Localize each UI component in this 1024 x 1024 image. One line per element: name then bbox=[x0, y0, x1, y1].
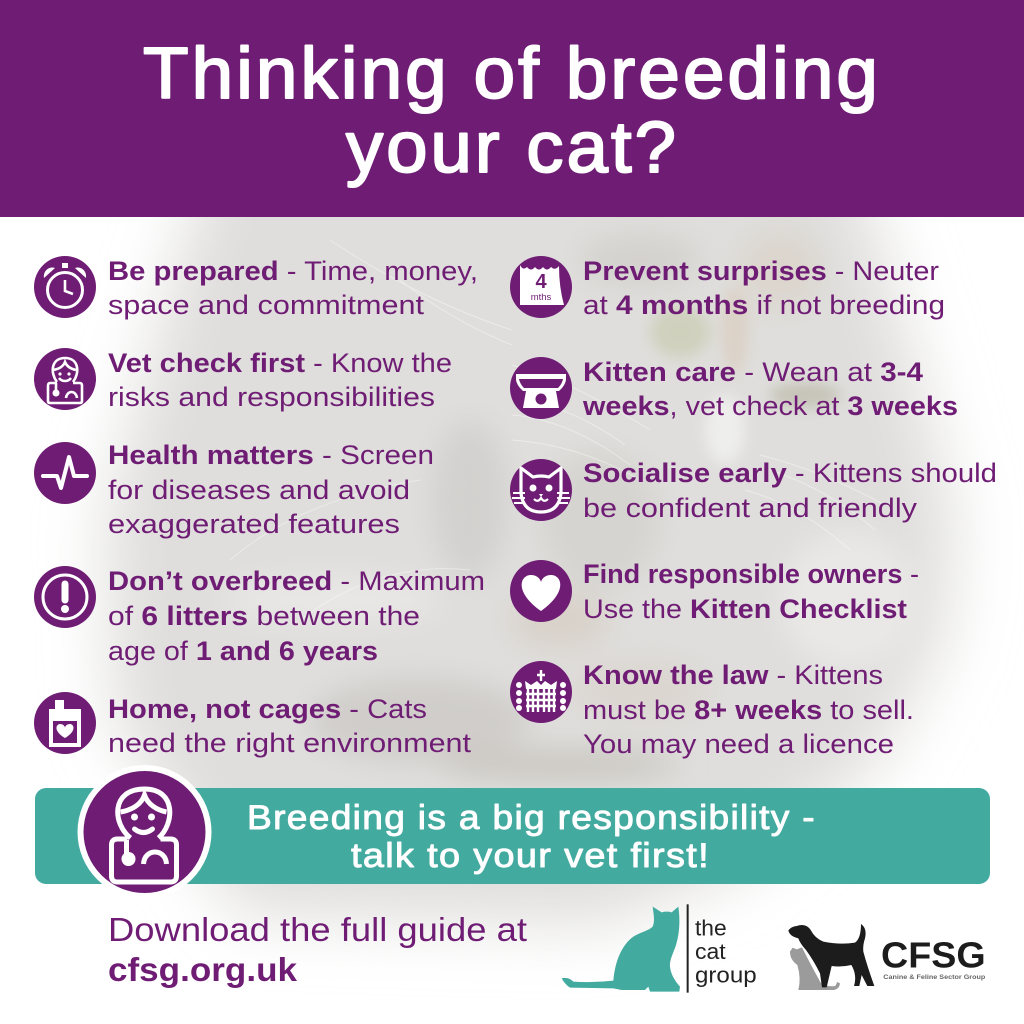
text: kitten care: weeks, vet check at 3 weeks bbox=[582, 391, 958, 421]
callout banner bbox=[35, 765, 990, 899]
text: vet check bbox=[108, 348, 452, 412]
panel: left column tips bbox=[34, 256, 485, 758]
icon: portcullis bbox=[510, 661, 572, 723]
logo: CFSG bbox=[788, 924, 986, 990]
icon: cat face bbox=[510, 459, 572, 521]
icon: heart bbox=[510, 560, 572, 622]
text: health matters: for diseases and avoid bbox=[108, 475, 410, 505]
text: home not cages: need the right environment bbox=[108, 728, 472, 758]
banner message bbox=[247, 799, 816, 875]
logo: the cat group: the bbox=[695, 916, 727, 941]
logo: the cat group: group bbox=[695, 962, 757, 987]
text: don't overbreed: age of 1 and 6 years bbox=[108, 636, 378, 666]
logo: CFSG: CFSG bbox=[881, 934, 986, 975]
text: vet check: Vet check first - Know the bbox=[108, 348, 452, 378]
text: be prepared: space and commitment bbox=[108, 290, 425, 320]
title: Thinking of breeding bbox=[143, 34, 881, 114]
text: health matters: exaggerated features bbox=[108, 509, 400, 539]
logo: the cat group bbox=[562, 904, 757, 993]
icon: weighing scales bbox=[510, 357, 572, 419]
icon: vet bbox=[34, 348, 96, 410]
banner message: talk to your vet first! bbox=[351, 837, 710, 875]
panel: right column tips bbox=[510, 256, 997, 759]
text: know the law: must be 8+ weeks to sell. bbox=[583, 695, 914, 725]
text: home not cages: Home, not cages - Cats bbox=[108, 694, 427, 724]
icon: calendar 4 months: 4 bbox=[535, 271, 547, 293]
text: kitten care bbox=[582, 357, 958, 421]
text: find responsible owners: Find responsible owners - bbox=[583, 559, 919, 589]
text: socialise early bbox=[583, 458, 997, 523]
icon: calendar 4 months: mths bbox=[531, 292, 552, 303]
icon: alarm clock bbox=[34, 256, 96, 318]
title: your cat? bbox=[346, 108, 679, 188]
logo: CFSG: Canine & Feline Sector Group bbox=[883, 975, 986, 981]
footer: download text: cfsg.org.uk bbox=[108, 951, 298, 988]
text: don't overbreed bbox=[108, 566, 485, 666]
text: health matters: Health matters - Screen bbox=[108, 440, 434, 470]
text: prevent surprises: Prevent surprises - Neuter bbox=[583, 256, 939, 286]
icon: pulse bbox=[34, 442, 96, 504]
text: be prepared bbox=[108, 256, 478, 320]
text: vet check: risks and responsibilities bbox=[108, 382, 435, 412]
icon: vet badge bbox=[78, 765, 212, 899]
text: socialise early: Socialise early - Kittens should bbox=[583, 458, 997, 488]
footer: download text: Download the full guide at bbox=[108, 911, 527, 948]
text: be prepared: Be prepared - Time, money, bbox=[108, 256, 478, 286]
title bbox=[143, 34, 881, 188]
text: know the law bbox=[583, 660, 914, 759]
text: prevent surprises: at 4 months if not breeding bbox=[583, 290, 945, 320]
footer: download text bbox=[108, 911, 527, 988]
grey cat bbox=[790, 947, 840, 990]
cat silhouette bbox=[562, 907, 680, 992]
text: don't overbreed: of 6 litters between the bbox=[108, 601, 420, 631]
text: don't overbreed: Don’t overbreed - Maximum bbox=[108, 566, 485, 596]
text: socialise early: be confident and friendly bbox=[583, 493, 918, 523]
text: prevent surprises bbox=[583, 256, 945, 320]
text: kitten care: Kitten care - Wean at 3-4 bbox=[583, 357, 923, 387]
banner message: Breeding is a big responsibility - bbox=[247, 799, 816, 837]
text: know the law: You may need a licence bbox=[583, 729, 894, 759]
black dog bbox=[788, 924, 874, 987]
icon: home cage carrier bbox=[34, 692, 96, 754]
icon: exclamation bbox=[34, 566, 96, 628]
text: home not cages bbox=[108, 694, 472, 758]
logo: the cat group: cat bbox=[695, 939, 726, 964]
text: health matters bbox=[108, 440, 434, 539]
text: find responsible owners bbox=[583, 559, 919, 624]
text: find responsible owners: Use the Kitten Checklist bbox=[583, 594, 907, 624]
text: know the law: Know the law - Kittens bbox=[583, 660, 883, 690]
icon: calendar 4 months bbox=[510, 256, 572, 318]
header band bbox=[0, 0, 1024, 217]
